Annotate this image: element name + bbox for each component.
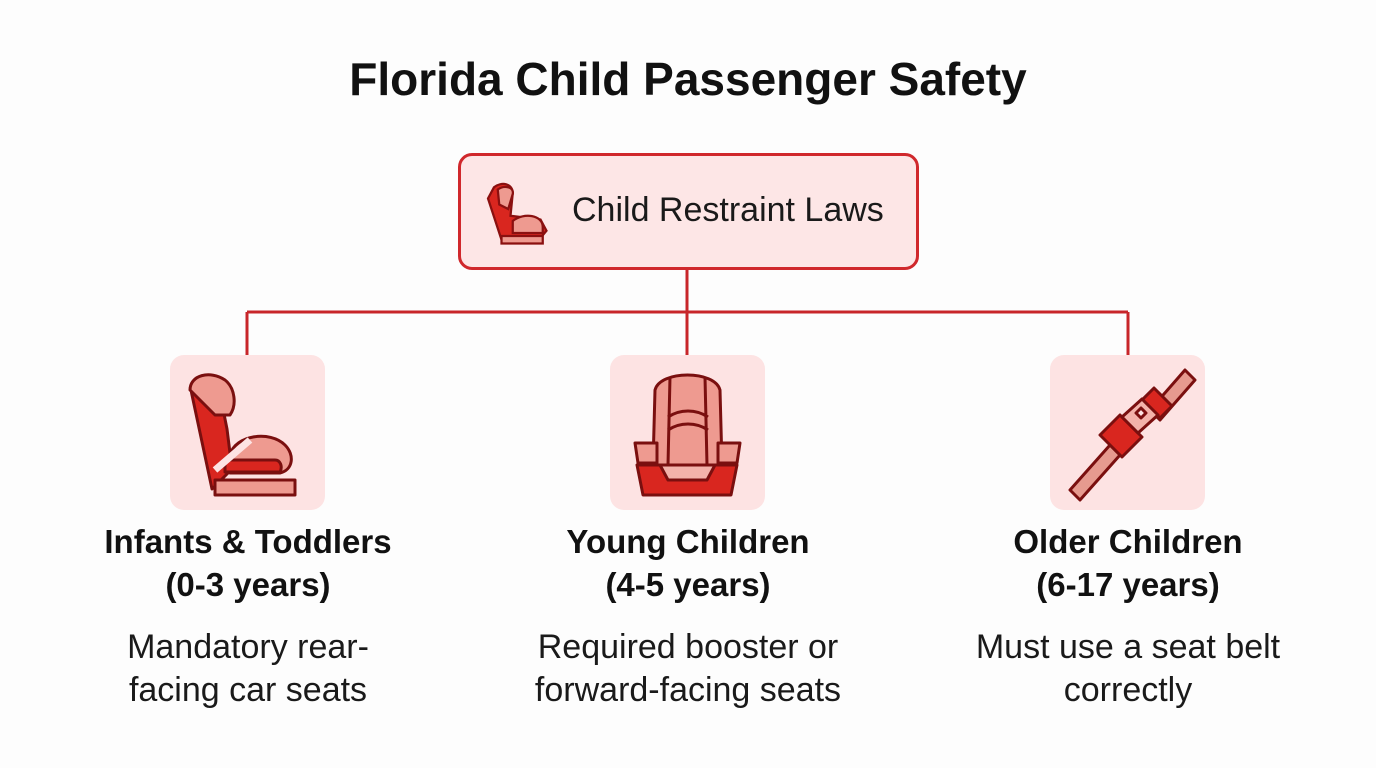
label: Child Restraint Laws: [572, 191, 884, 229]
heading: (0-3 years): [165, 566, 331, 603]
panel: infants: [104, 355, 392, 709]
description: Required booster or: [538, 628, 838, 666]
description: [127, 628, 369, 709]
description: Must use a seat belt: [976, 628, 1280, 666]
icon: booster seat: [610, 355, 765, 510]
top box: Child Restraint Laws: [458, 153, 919, 270]
heading: (4-5 years): [605, 566, 771, 603]
icon: small car seat: [486, 182, 548, 245]
description: correctly: [1064, 671, 1192, 709]
description: [535, 628, 841, 709]
heading: [566, 523, 810, 603]
icon: rear-facing seat: [170, 355, 325, 510]
description: forward-facing seats: [535, 671, 841, 709]
heading: Young Children: [566, 523, 810, 560]
icon: seat belt: [1050, 355, 1205, 510]
heading: [1013, 523, 1243, 603]
description: [976, 628, 1280, 709]
panel: young children: [535, 355, 841, 709]
description: Mandatory rear-: [127, 628, 369, 666]
heading: Infants & Toddlers: [104, 523, 392, 560]
panel: older children: [976, 355, 1280, 709]
description: facing car seats: [129, 671, 367, 709]
title: Florida Child Passenger Safety: [349, 53, 1027, 105]
heading: [104, 523, 392, 603]
heading: (6-17 years): [1036, 566, 1220, 603]
heading: Older Children: [1013, 523, 1243, 560]
